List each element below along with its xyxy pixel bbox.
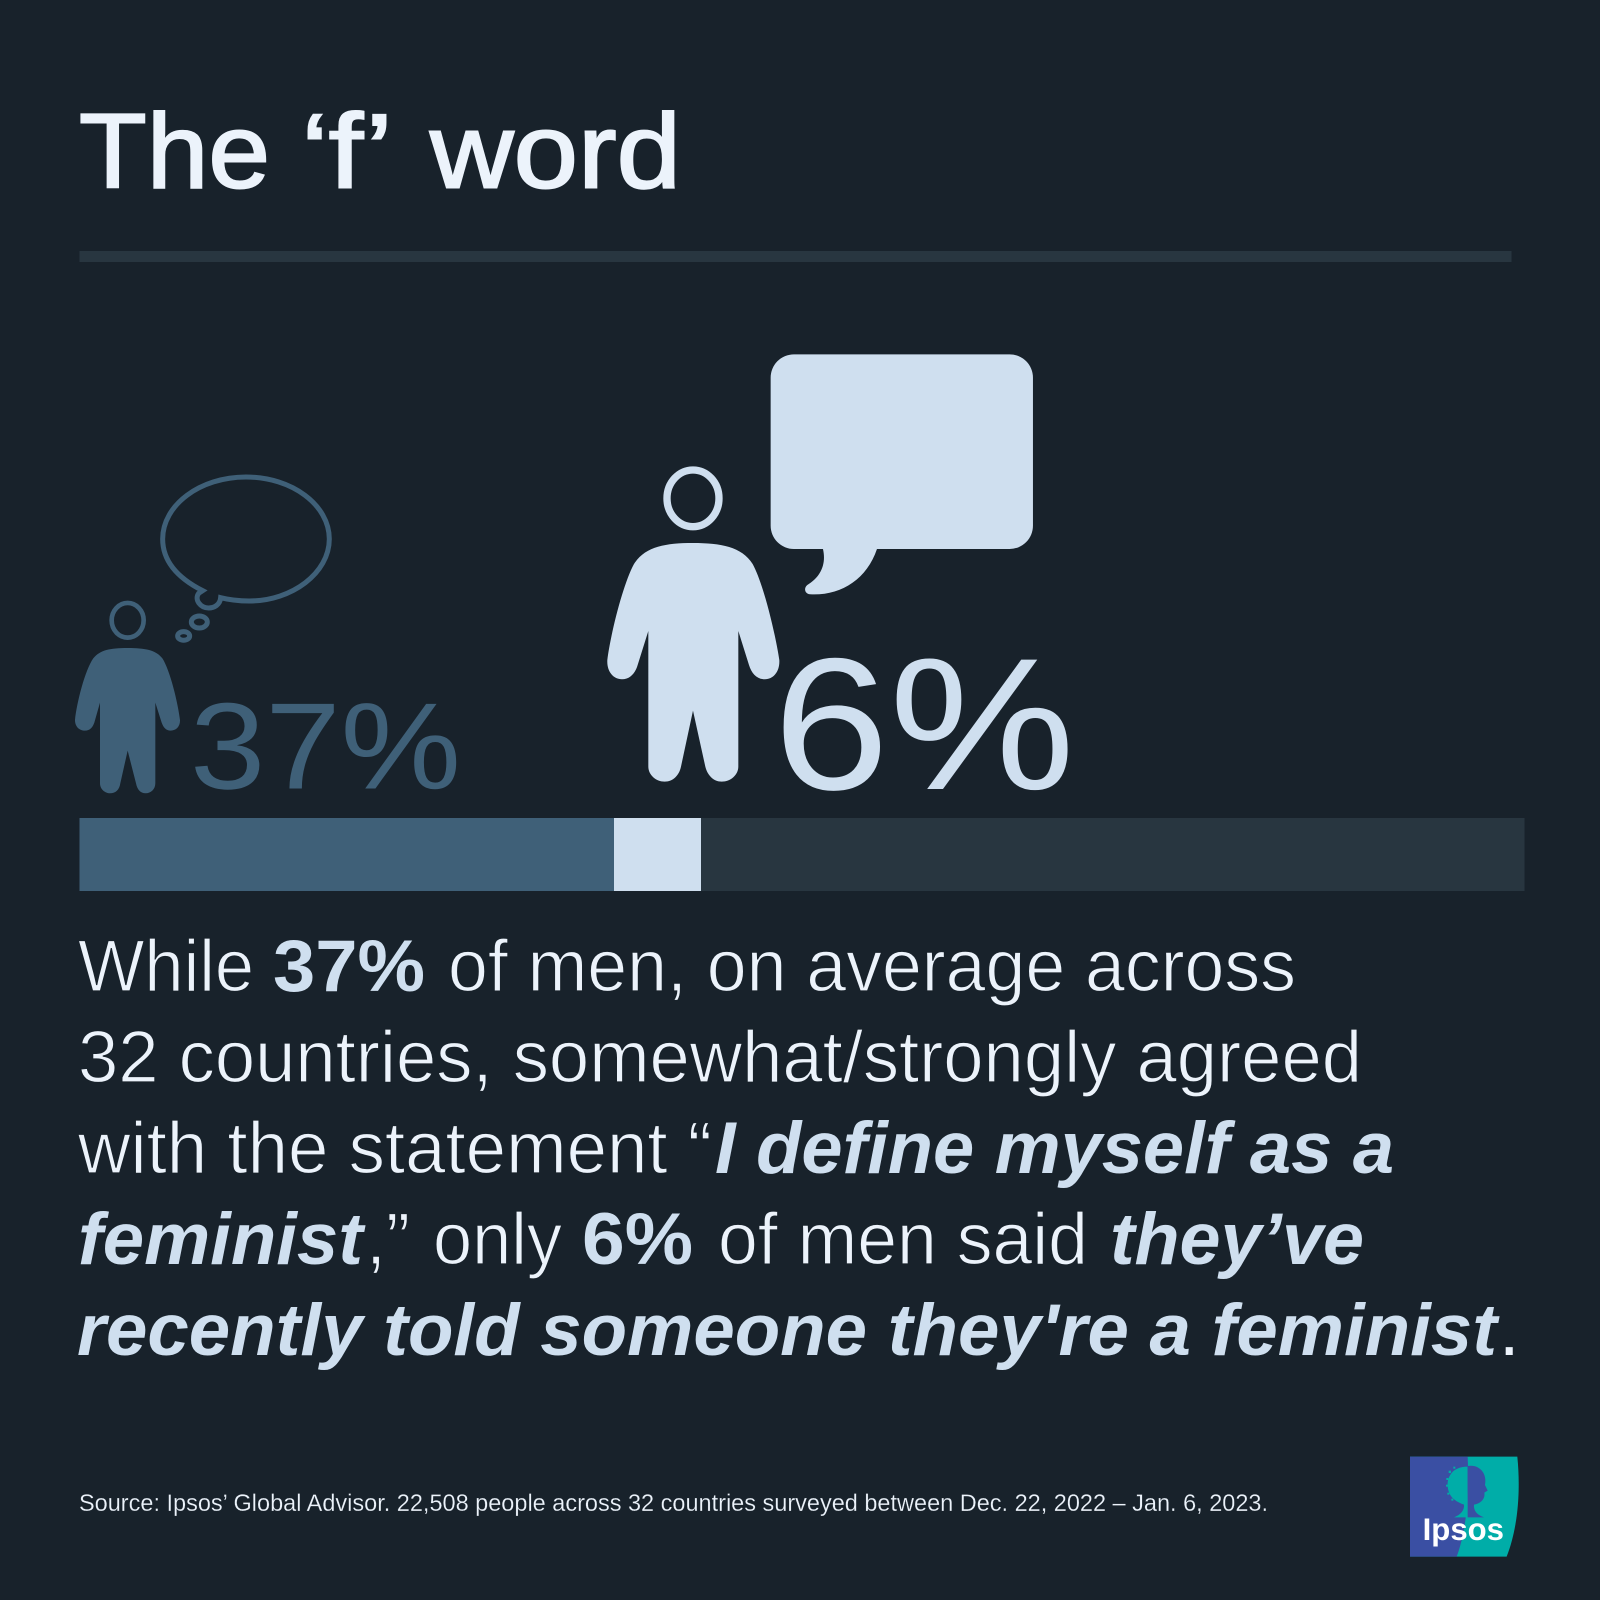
logo: Ipsos [1410,1457,1519,1557]
icon: thinking person [75,477,329,793]
logo: Ipsos: Ipsos [1423,1512,1504,1547]
head [112,603,144,638]
stat: 6%: 6% [773,619,1075,829]
body text: While [78,924,254,1007]
title [79,92,681,210]
body [75,648,180,793]
body [607,543,779,782]
stacked progress bar [80,818,1524,891]
body text: I define myself as a [715,1106,1394,1189]
title: The [79,92,270,210]
body text: they’ve [1110,1197,1364,1280]
tree hair and face silhouette [1446,1467,1468,1517]
body text: only [433,1197,562,1280]
body text: 37% [273,924,425,1007]
body text [77,924,1519,1371]
body text: of men, on average across [448,924,1296,1007]
title: ‘f’ [301,92,393,210]
icon: speaking person [607,354,1033,782]
title: word [429,92,681,210]
body text: . [1499,1288,1519,1371]
body text: recently told someone they're a feminist [77,1288,1500,1371]
body text: 32 countries, somewhat/strongly agreed [78,1015,1362,1098]
body text: feminist [78,1197,366,1280]
body text: with the statement “ [77,1106,712,1189]
source note: Source: Ipsos’ Global Advisor. 22,508 people across 32 countries surveyed between Dec. 22, 2022 – Jan. 6, 2023. [79,1490,1268,1517]
body text: of men said [718,1197,1088,1280]
speech bubble [771,354,1033,594]
thought bubble [163,477,329,640]
head [667,470,719,527]
body text: 6% [582,1197,693,1280]
stat: 37%: 37% [190,678,461,816]
body text: ,” [366,1197,410,1280]
